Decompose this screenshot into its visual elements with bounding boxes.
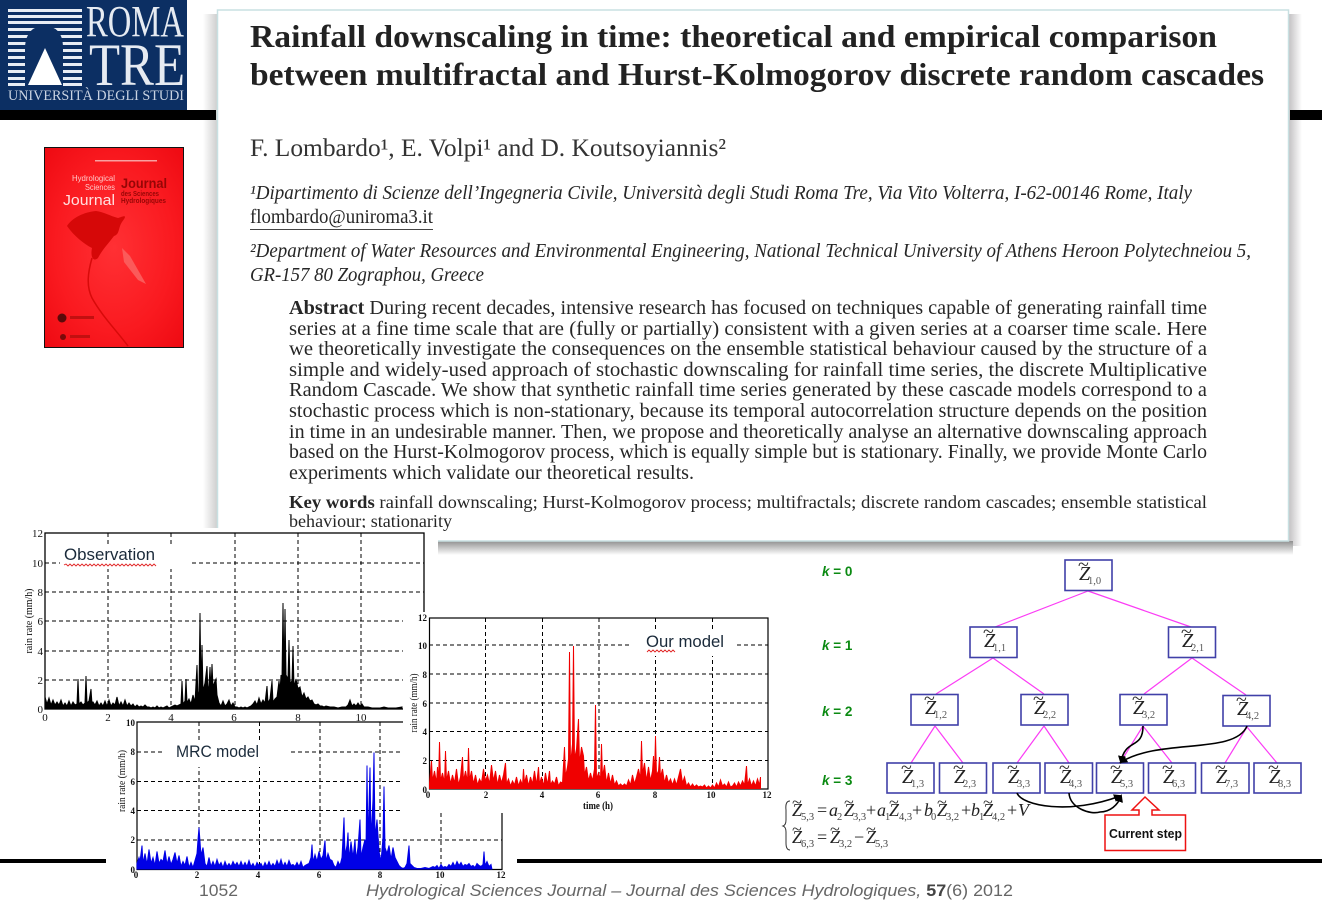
node Z2,1: ~ bbox=[1181, 621, 1192, 643]
callout: current step: Current step bbox=[1109, 827, 1182, 841]
axes labels: 4 bbox=[130, 806, 136, 816]
node Z6,3 bbox=[1148, 757, 1196, 793]
label: Our model: Our model bbox=[646, 632, 724, 651]
MRC rainfall series bbox=[137, 752, 492, 870]
node Z3,2: 3,2 bbox=[1142, 710, 1155, 721]
axes labels: 8 bbox=[130, 747, 136, 757]
node Z8,3: ~ bbox=[1268, 757, 1279, 779]
logo: Roma Tre university: UNIVERSITÀ DEGLI STUDI bbox=[8, 87, 184, 104]
axes labels: 2 bbox=[422, 756, 428, 766]
arrows into current node bbox=[1017, 726, 1247, 813]
node Z4,2: ~ bbox=[1236, 689, 1247, 711]
axes labels: 6 bbox=[130, 777, 136, 787]
equations: ~ bbox=[937, 792, 947, 812]
axes labels: 8 bbox=[38, 587, 44, 599]
node Z4,3: 4,3 bbox=[1069, 779, 1082, 790]
axes labels: 2 bbox=[105, 712, 111, 724]
equations: V bbox=[1018, 800, 1031, 820]
label: MRC model: MRC model bbox=[176, 742, 259, 761]
equations: ~ bbox=[983, 792, 993, 812]
node Z1,0: Z bbox=[1079, 563, 1091, 585]
axes labels: time (h) bbox=[583, 801, 613, 812]
equations: a bbox=[829, 800, 838, 820]
label: Observation: Observation bbox=[64, 545, 155, 564]
equations: + bbox=[866, 800, 876, 820]
authors: F. Lombardo¹, E. Volpi¹ and D. Koutsoyiannis² bbox=[250, 135, 726, 162]
equations: 4,2 bbox=[992, 812, 1005, 823]
node Z7,3: Z bbox=[1216, 766, 1228, 788]
node Z2,1 bbox=[1168, 621, 1216, 658]
axes labels: 4 bbox=[38, 646, 44, 658]
node Z1,3: Z bbox=[902, 766, 914, 788]
equations: 0 bbox=[931, 812, 936, 823]
node Z1,2: ~ bbox=[924, 688, 935, 710]
node Z5,3 bbox=[1096, 757, 1144, 793]
equations: Z bbox=[889, 800, 900, 820]
equations: 6,3 bbox=[801, 839, 814, 850]
node Z8,3: 8,3 bbox=[1278, 779, 1291, 790]
node Z4,3: ~ bbox=[1059, 757, 1070, 779]
node Z7,3 bbox=[1202, 757, 1249, 793]
axes labels: 6 bbox=[231, 712, 237, 724]
axes labels: 6 bbox=[422, 699, 428, 709]
equations: ~ bbox=[830, 819, 840, 839]
equations: a bbox=[877, 800, 886, 820]
diagram: discrete random cascade tree bbox=[783, 554, 1301, 850]
abstract: in time in an undesirable manner. Then, we propose and theoretically analyse an alternative downscaling approach bbox=[289, 422, 1207, 443]
axes labels: 0 bbox=[38, 704, 44, 716]
abstract: experiments which validate our theoretical results. bbox=[289, 463, 694, 484]
axes labels: 12 bbox=[418, 613, 428, 623]
node Z2,3: Z bbox=[954, 766, 966, 788]
axes labels: 8 bbox=[422, 670, 428, 680]
title: between multifractal and Hurst-Kolmogorov discrete random cascades bbox=[250, 56, 1264, 92]
axes labels: 0 bbox=[130, 865, 136, 875]
journal cover: des Sciences bbox=[121, 189, 159, 198]
axes labels: 4 bbox=[256, 870, 261, 880]
axes labels: 10 bbox=[356, 712, 367, 724]
abstract: series at a fine time scale that are (fully or partially) consistent with a given series at a coarser time scale. Here bbox=[289, 319, 1207, 340]
node Z2,3: 2,3 bbox=[963, 779, 976, 790]
abstract: stochastic process which is non-stationary, because its temporal autocorrelation structure depends on the position bbox=[289, 401, 1207, 422]
node Z1,0: ~ bbox=[1078, 554, 1089, 576]
node Z4,3 bbox=[1045, 757, 1092, 793]
observation rainfall series bbox=[45, 603, 402, 709]
axes labels: 2 bbox=[130, 835, 136, 845]
axes labels: 8 bbox=[653, 790, 658, 800]
chart: Our model bbox=[403, 612, 772, 813]
axes labels: 6 bbox=[38, 616, 44, 628]
node Z4,3: Z bbox=[1060, 766, 1072, 788]
equations: Z bbox=[792, 800, 803, 820]
axes labels: 6 bbox=[596, 790, 601, 800]
affiliations bbox=[250, 183, 1251, 286]
abstract: simple and widely-used approach of stochastic downscaling for rainfall time series, the discrete Multiplicative bbox=[289, 360, 1207, 381]
equations: 5,3 bbox=[801, 812, 814, 823]
equations: b bbox=[924, 800, 933, 820]
equations: 3,3 bbox=[853, 812, 866, 823]
equations: Z bbox=[792, 827, 803, 847]
journal cover: Journal bbox=[121, 175, 167, 191]
equations: Z bbox=[844, 800, 855, 820]
axes labels: 8 bbox=[378, 870, 383, 880]
equations: = bbox=[817, 800, 827, 820]
abstract: we theoretically investigate the consequences on the ensemble statistical behaviour caused by the structure of a bbox=[289, 339, 1207, 360]
equations: − bbox=[854, 827, 864, 847]
axes labels: 2 bbox=[38, 675, 43, 687]
node Z1,2: Z bbox=[925, 697, 937, 719]
level labels: k = 1 bbox=[822, 638, 853, 653]
node Z2,2 bbox=[1021, 688, 1068, 725]
axes labels: 10 bbox=[418, 641, 428, 651]
equations: ~ bbox=[866, 819, 876, 839]
axes labels: 12 bbox=[496, 870, 506, 880]
equations: + bbox=[961, 800, 971, 820]
equations bbox=[783, 792, 1031, 850]
axes labels: 6 bbox=[317, 870, 322, 880]
abstract: Random Cascade. We show that synthetic rainfall time series generated by these cascade models correspond to a bbox=[289, 380, 1207, 401]
node Z6,3: ~ bbox=[1162, 757, 1173, 779]
equations: + bbox=[1007, 800, 1017, 820]
equations: = bbox=[817, 827, 827, 847]
axes labels: rain rate (mm/h) bbox=[117, 750, 128, 812]
level labels: k = 2 bbox=[822, 704, 852, 719]
node Z3,3 bbox=[993, 757, 1040, 793]
equations: ~ bbox=[792, 819, 802, 839]
node Z8,3: Z bbox=[1269, 766, 1281, 788]
abstract: based on the Hurst-Kolmogorov process, which is equally simple but is stationary. Finally, we provide Monte Carlo bbox=[289, 442, 1207, 463]
level labels bbox=[822, 564, 853, 788]
equations: 5,3 bbox=[875, 839, 888, 850]
journal cover: Hydrologiques bbox=[121, 196, 166, 205]
node Z2,3 bbox=[940, 757, 986, 793]
axes labels: 8 bbox=[295, 712, 301, 724]
node Z2,2: Z bbox=[1034, 697, 1046, 719]
node Z8,3 bbox=[1254, 757, 1301, 793]
key words bbox=[289, 492, 1207, 531]
node Z3,2: ~ bbox=[1132, 688, 1143, 710]
axes labels: 4 bbox=[540, 790, 545, 800]
equations: Z bbox=[983, 800, 994, 820]
axes labels: 4 bbox=[168, 712, 174, 724]
node Z2,3: ~ bbox=[953, 757, 964, 779]
chart: MRC model bbox=[106, 718, 517, 888]
top black rule bbox=[0, 110, 1322, 120]
equations: 4,3 bbox=[899, 812, 912, 823]
node Z1,3: 1,3 bbox=[911, 779, 924, 790]
node Z2,1: Z bbox=[1182, 630, 1194, 652]
node Z6,3: Z bbox=[1163, 766, 1175, 788]
node Z5,3: 5,3 bbox=[1120, 779, 1133, 790]
affiliations: GR-157 80 Zographou, Greece bbox=[250, 265, 484, 286]
equations: ~ bbox=[889, 792, 899, 812]
panel: paper shadow bbox=[203, 14, 1302, 555]
node Z1,0: 1,0 bbox=[1088, 576, 1101, 587]
axes labels bbox=[117, 718, 506, 880]
axes labels bbox=[23, 528, 367, 724]
axes labels: 12 bbox=[762, 790, 772, 800]
equations: Z bbox=[830, 827, 841, 847]
abstract bbox=[289, 298, 1207, 484]
level labels: k = 3 bbox=[822, 773, 853, 788]
title bbox=[250, 18, 1264, 92]
node Z4,2 bbox=[1223, 689, 1270, 726]
node Z1,2: 1,2 bbox=[934, 710, 947, 721]
node Z2,2: ~ bbox=[1033, 688, 1044, 710]
logo: Roma Tre university bbox=[0, 0, 187, 110]
callout: current step bbox=[1105, 797, 1186, 850]
node Z3,2 bbox=[1120, 688, 1167, 725]
equations: 2 bbox=[837, 812, 842, 823]
journal cover bbox=[44, 148, 184, 348]
footer: journal citation: Hydrological Sciences Journal – Journal des Sciences Hydrologiques, 57(6) 2012 bbox=[366, 881, 1013, 900]
title: Rainfall downscaling in time: theoretical and empirical comparison bbox=[250, 18, 1217, 54]
axes labels bbox=[409, 613, 772, 812]
node Z7,3: ~ bbox=[1215, 757, 1226, 779]
node Z7,3: 7,3 bbox=[1225, 779, 1238, 790]
equations: 3,2 bbox=[839, 839, 852, 850]
equations: 3,2 bbox=[946, 812, 959, 823]
node Z1,2 bbox=[911, 688, 958, 725]
footer: page number: 1052 bbox=[199, 881, 238, 900]
equations: 1 bbox=[979, 812, 984, 823]
logo: Roma Tre university: TRE bbox=[89, 32, 185, 98]
equations: Z bbox=[937, 800, 948, 820]
journal cover: Sciences bbox=[85, 182, 115, 192]
node Z1,1: ~ bbox=[983, 621, 994, 643]
equations: ~ bbox=[844, 792, 854, 812]
axes labels: 0 bbox=[134, 870, 139, 880]
node Z1,1 bbox=[970, 621, 1017, 658]
node Z3,3: ~ bbox=[1007, 757, 1018, 779]
axes labels: 10 bbox=[706, 790, 716, 800]
our model rainfall series bbox=[430, 646, 760, 789]
axes labels: 0 bbox=[422, 785, 428, 795]
axes labels: 4 bbox=[422, 727, 428, 737]
affiliations: flombardo@uniroma3.it bbox=[250, 207, 434, 228]
node Z3,3: 3,3 bbox=[1017, 779, 1030, 790]
node Z5,3: ~ bbox=[1110, 757, 1121, 779]
node Z4,2: Z bbox=[1237, 698, 1249, 720]
node Z1,3 bbox=[887, 757, 934, 793]
key words: Key words rainfall downscaling; Hurst-Kolmogorov process; multifractals; discrete random cascades; ensemble statistical bbox=[289, 492, 1207, 512]
key words: behaviour; stationarity bbox=[289, 511, 452, 531]
axes labels: 10 bbox=[32, 558, 44, 570]
equations: Z bbox=[866, 827, 877, 847]
axes labels: 2 bbox=[484, 790, 489, 800]
axes labels: 10 bbox=[126, 718, 136, 728]
axes labels: 2 bbox=[195, 870, 200, 880]
axes labels: rain rate (mm/h) bbox=[23, 588, 35, 654]
abstract: Abstract During recent decades, intensive research has focused on techniques capable of generating rainfall time bbox=[289, 298, 1207, 319]
level labels: k = 0 bbox=[822, 564, 852, 579]
journal cover: Hydrological bbox=[72, 173, 115, 183]
node Z2,1: 2,1 bbox=[1191, 643, 1204, 654]
node Z6,3: 6,3 bbox=[1172, 779, 1185, 790]
equations: ~ bbox=[792, 792, 802, 812]
axes labels: rain rate (mm/h) bbox=[409, 673, 420, 732]
equations: b bbox=[971, 800, 980, 820]
axes labels: 0 bbox=[42, 712, 48, 724]
bottom black rule bbox=[0, 859, 1322, 863]
node Z1,3: ~ bbox=[901, 757, 912, 779]
axes labels: 12 bbox=[32, 528, 43, 540]
journal cover: Journal bbox=[63, 192, 115, 209]
chart: Observation bbox=[20, 528, 438, 724]
affiliations: ²Department of Water Resources and Environmental Engineering, National Technical University of Athens Heroon Polytechneiou 5, bbox=[250, 241, 1251, 262]
node Z3,3: Z bbox=[1008, 766, 1020, 788]
equations: + bbox=[912, 800, 922, 820]
connectors bbox=[911, 591, 1277, 763]
node Z2,2: 2,2 bbox=[1043, 710, 1056, 721]
node Z1,1: 1,1 bbox=[993, 643, 1006, 654]
axes labels: 0 bbox=[426, 790, 431, 800]
node Z1,1: Z bbox=[984, 630, 996, 652]
affiliations: ¹Dipartimento di Scienze dell’Ingegneria Civile, Università degli Studi Roma Tre, Via Vito Volterra, I-62-00146 Rome, Italy bbox=[250, 183, 1192, 204]
axes labels: 10 bbox=[436, 870, 445, 880]
node Z4,2: 4,2 bbox=[1246, 711, 1259, 722]
equations: 1 bbox=[885, 812, 890, 823]
panel: paper front page bbox=[218, 10, 1288, 541]
node Z5,3: Z bbox=[1111, 766, 1123, 788]
node Z1,0 bbox=[1065, 554, 1112, 590]
node Z3,2: Z bbox=[1133, 697, 1145, 719]
